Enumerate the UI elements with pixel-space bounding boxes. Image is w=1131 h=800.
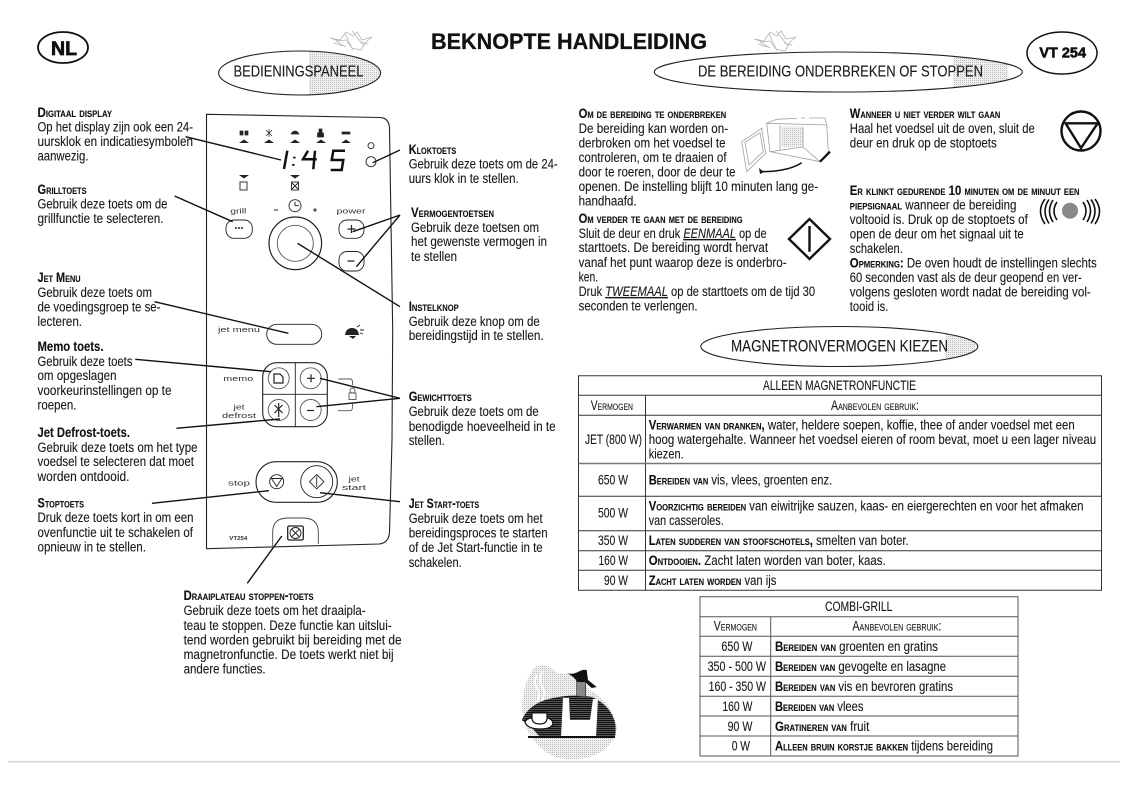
panel: control panel drawing <box>206 114 393 549</box>
table: combi-grill: Vermogen <box>714 619 757 634</box>
table: combi-grill: Bereiden van gevogelte en lasagne <box>775 659 946 674</box>
text: draaiplateau stoppen-toets: tend worden gebruikt bij bereiding met de <box>184 632 402 648</box>
table: combi-grill: Bereiden van vis en bevroren gratins <box>775 679 953 694</box>
text: gewichttoets <box>409 389 556 448</box>
text: wanneer u niet verder wilt gaan <box>850 106 1035 150</box>
table: alleen magnetronfunctie: Verwarmen van dranken, water, heldere soepen, koffie, thee of ander voedsel met een <box>649 417 1075 432</box>
table: combi-grill: COMBI-GRILL <box>825 599 893 614</box>
text: vermogentoetsen <box>411 205 547 264</box>
turntable stop button: VT254 <box>229 536 248 542</box>
text: grilltoets: grillfunctie te selecteren. <box>38 211 164 226</box>
text: om de bereiding te onderbreken: De bereiding kan worden on- <box>579 121 728 136</box>
text: gewichttoets: Gewichttoets <box>409 389 472 404</box>
text: jet start-toets: Jet Start-toets <box>409 496 479 511</box>
heading: magnetronvermogen kiezen: MAGNETRONVERMOGEN KIEZEN <box>731 337 948 356</box>
text: om de bereiding te onderbreken: Om de bereiding te onderbreken <box>579 106 726 121</box>
text: stoptoets: Druk deze toets kort in om een <box>38 510 194 525</box>
text: opmerking <box>850 256 1097 314</box>
text: instelknop <box>409 299 544 343</box>
text: piepsignaal: piepsignaal wanneer de bereiding <box>850 198 1016 212</box>
icon: chef with coffee <box>522 665 617 759</box>
text: jet defrost-toets: worden ontdooid. <box>37 469 129 484</box>
stop and start button group <box>228 462 367 502</box>
icon: beep signal <box>1040 199 1100 224</box>
text: piepsignaal: schakelen. <box>850 241 903 256</box>
table: combi-grill: 90 W <box>728 719 753 734</box>
text: kloktoets: Gebruik deze toets om de 24- <box>409 156 558 172</box>
digital display 1:45 <box>284 151 345 170</box>
table: alleen magnetronfunctie: Ontdooien. Zacht laten worden van boter, kaas. <box>649 553 886 568</box>
text: vermogentoetsen: Gebruik deze toetsen om <box>411 220 539 235</box>
table: combi-grill: Bereiden van vlees <box>775 699 864 714</box>
text: om de bereiding te onderbreken <box>579 106 818 209</box>
table: alleen magnetronfunctie: 90 W <box>604 573 628 588</box>
text: jet start-toets: schakelen. <box>409 555 462 570</box>
clock key <box>366 143 376 167</box>
table: alleen magnetronfunctie: 500 W <box>598 506 628 521</box>
text: om verder te gaan: seconden te verlengen. <box>579 299 698 314</box>
heading: de bereiding onderbreken of stoppen <box>654 52 1022 92</box>
text: stoptoets: ovenfunctie uit te schakelen of <box>38 525 193 540</box>
table: combi-grill: 160 - 350 W <box>709 679 766 694</box>
text: draaiplateau stoppen-toets: andere functies. <box>184 662 266 676</box>
dial <box>269 200 322 270</box>
text: grilltoets: Grilltoets <box>38 182 86 197</box>
text: draaiplateau stoppen-toets <box>184 588 402 676</box>
text: vermogentoetsen: te stellen <box>411 249 457 264</box>
table: combi-grill: Aanbevolen gebruik: <box>852 619 941 634</box>
text: piepsignaal: open de deur om het signaal uit te <box>850 227 1024 242</box>
text: om verder te gaan: ken. <box>579 270 598 285</box>
text: memo toets: roepen. <box>38 398 76 412</box>
heading: de bereiding onderbreken of stoppen: DE BEREIDING ONDERBREKEN OF STOPPEN <box>698 64 983 81</box>
text: om de bereiding te onderbreken: openen. De instelling blijft 10 minuten lang ge- <box>579 179 818 194</box>
text: draaiplateau stoppen-toets: teau te stoppen. Deze functie kan uitslui- <box>184 618 392 633</box>
table: combi-grill: 0 W <box>732 739 750 754</box>
text: instelknop: Instelknop <box>409 299 459 314</box>
heading: magnetronvermogen kiezen <box>701 326 978 367</box>
text: instelknop: bereidingstijd in te stellen. <box>409 328 544 343</box>
table: alleen magnetronfunctie: ALLEEN MAGNETRONFUNCTIE <box>763 378 916 393</box>
text: om verder te gaan <box>579 211 815 314</box>
stop and start button group: stop <box>228 478 250 488</box>
panel outline <box>206 114 393 549</box>
leader lines <box>135 137 400 583</box>
stop and start button group: jet <box>347 474 361 484</box>
text: om verder te gaan: Om verder te gaan met de bereiding <box>579 211 743 226</box>
table: combi-grill: 650 W <box>721 639 753 654</box>
text: piepsignaal: Er klinkt gedurende 10 minuten om de minuut een <box>850 183 1080 198</box>
text: wanneer u niet verder wilt gaan: Wanneer u niet verder wilt gaan <box>850 106 1000 121</box>
text: kloktoets: Kloktoets <box>409 142 456 157</box>
table: combi-grill: 350 - 500 W <box>708 659 766 674</box>
text: vermogentoetsen: het gewenste vermogen in <box>411 234 547 249</box>
text: jet defrost-toets: Gebruik deze toets om het type <box>38 440 198 455</box>
table: combi-grill: 160 W <box>722 699 753 714</box>
badge: NL: NL <box>51 39 77 60</box>
text: opmerking: volgens gesloten wordt nadat de bereiding vol- <box>850 285 1091 300</box>
text: om verder te gaan: Sluit de deur en druk EENMAAL op de <box>579 226 767 241</box>
text: jet defrost-toets <box>37 425 197 484</box>
text: om de bereiding te onderbreken: derbroken om het voedsel te <box>579 136 726 150</box>
icon: open oven <box>742 118 830 174</box>
table: alleen magnetronfunctie: Aanbevolen gebruik: <box>831 398 919 413</box>
text: memo toets: voorkeurinstellingen op te <box>38 383 172 398</box>
text: grilltoets: Gebruik deze toets om de <box>38 196 168 212</box>
text: grilltoets <box>38 182 168 226</box>
text: om verder te gaan: vanaf het punt waarop deze is onderbro- <box>579 255 787 270</box>
icon: start diamond <box>789 219 830 259</box>
table: combi-grill: Alleen bruin korstje bakken tijdens bereiding <box>775 739 993 754</box>
badge: VT 254: VT 254 <box>1039 46 1086 62</box>
text: opmerking: Opmerking: De oven houdt de instellingen slechts <box>850 256 1097 271</box>
icon: stop symbol <box>1062 112 1100 150</box>
text: memo toets: Gebruik deze toets <box>38 354 133 369</box>
table: alleen magnetronfunctie: 350 W <box>598 533 628 548</box>
grill button: grill <box>230 206 247 216</box>
text: gewichttoets: Gebruik deze toets om de <box>409 404 539 419</box>
grill button <box>226 206 252 238</box>
lower indicators <box>239 175 300 190</box>
jet menu button: jet menu <box>217 325 260 334</box>
text: jet start-toets: of de Jet Start-functie in te <box>409 540 543 555</box>
text: om de bereiding te onderbreken: door te roeren, door de deur te <box>579 165 736 180</box>
text: wanneer u niet verder wilt gaan: deur en druk op de stoptoets <box>850 136 997 150</box>
indicator icons top row <box>239 129 351 143</box>
text: gewichttoets: benodigde hoeveelheid in te <box>409 419 556 434</box>
table: combi-grill <box>700 597 1018 756</box>
text: piepsignaal <box>850 183 1080 256</box>
title: BEKNOPTE HANDLEIDING <box>431 29 707 54</box>
table: alleen magnetronfunctie: Bereiden van vis, vlees, groenten enz. <box>649 473 832 488</box>
heading: bedieningspaneel: BEDIENINGSPANEEL <box>234 64 364 81</box>
text: draaiplateau stoppen-toets: Gebruik deze toets om het draaipla- <box>184 603 366 618</box>
memo / weight button group: jet <box>232 402 246 412</box>
power buttons: power <box>336 206 366 216</box>
text: digitaal display: Op het display zijn ook een 24- <box>38 120 193 134</box>
icon: flourish left <box>330 31 372 50</box>
text: stoptoets: opnieuw in te stellen. <box>38 540 146 554</box>
text: om verder te gaan: starttoets. De bereiding wordt hervat <box>579 240 768 255</box>
text: jet menu: Jet Menu <box>38 270 80 285</box>
table: alleen magnetronfunctie: Zacht laten worden van ijs <box>649 573 777 588</box>
table: alleen magnetronfunctie: kiezen. <box>649 447 684 462</box>
text: jet start-toets: bereidingsproces te starten <box>409 526 548 540</box>
text: jet defrost-toets: voedsel te selecteren dat moet <box>38 454 194 469</box>
heading: bedieningspaneel <box>219 50 381 96</box>
jet menu button <box>217 324 364 344</box>
table: alleen magnetronfunctie <box>578 376 1102 590</box>
table: combi-grill: Gratineren van fruit <box>775 719 870 734</box>
text: jet defrost-toets: Jet Defrost-toets. <box>38 425 130 440</box>
text: jet menu <box>38 270 160 329</box>
badge: VT 254 <box>1027 32 1097 74</box>
table: alleen magnetronfunctie: 650 W <box>598 473 628 488</box>
text: memo toets: Memo toets. <box>38 339 104 354</box>
text: digitaal display <box>38 105 193 164</box>
text: digitaal display: Digitaal display <box>38 105 112 120</box>
stop and start button group: start <box>342 483 367 492</box>
text: digitaal display: aanwezig. <box>38 148 88 164</box>
table: combi-grill: Bereiden van groenten en gratins <box>775 639 938 654</box>
text: stoptoets <box>38 496 194 554</box>
table: alleen magnetronfunctie: 160 W <box>598 553 628 568</box>
text: jet menu: lecteren. <box>38 314 82 329</box>
turntable stop button <box>229 518 318 546</box>
text: memo toets <box>38 339 172 412</box>
text: vermogentoetsen: Vermogentoetsen <box>411 205 494 220</box>
table: alleen magnetronfunctie: JET (800 W) <box>585 432 642 447</box>
text: om de bereiding te onderbreken: controleren, om te draaien of <box>579 150 727 165</box>
text: opmerking: tooid is. <box>850 299 888 314</box>
text: jet menu: Gebruik deze toets om <box>38 285 152 300</box>
bottom rule <box>8 761 1120 762</box>
memo / weight button group: memo <box>223 374 253 383</box>
icon: flourish right <box>754 31 796 51</box>
text: kloktoets: uurs klok in te stellen. <box>409 171 519 186</box>
text: jet start-toets: Gebruik deze toets om het <box>409 511 543 526</box>
table: alleen magnetronfunctie: Vermogen <box>591 398 633 413</box>
text: wanneer u niet verder wilt gaan: Haal het voedsel uit de oven, sluit de <box>850 121 1035 136</box>
table: alleen magnetronfunctie: van casseroles. <box>649 513 724 528</box>
text: om de bereiding te onderbreken: handhaafd. <box>579 194 637 209</box>
text: opmerking: 60 seconden vast als de deur geopend en ver- <box>850 270 1082 285</box>
weight bracket <box>338 379 356 411</box>
text: instelknop: Gebruik deze knop om de <box>409 314 540 329</box>
badge: NL <box>38 32 88 63</box>
text: gewichttoets: stellen. <box>409 433 445 448</box>
text: kloktoets <box>409 142 558 186</box>
memo / weight button group <box>222 363 327 427</box>
text: jet menu: de voedingsgroep te se- <box>38 300 160 314</box>
text: digitaal display: uursklok en indicatiesymbolen <box>38 134 193 149</box>
memo / weight button group: defrost <box>222 411 257 420</box>
text: om verder te gaan: Druk TWEEMAAL op de starttoets om de tijd 30 <box>579 284 815 299</box>
text: draaiplateau stoppen-toets: magnetronfunctie. De toets werkt niet bij <box>184 647 394 662</box>
table: alleen magnetronfunctie: Laten sudderen van stoofschotels, smelten van boter. <box>649 533 909 548</box>
text: piepsignaal: voltooid is. Druk op de stoptoets of <box>850 212 1028 227</box>
text: jet start-toets <box>409 496 548 570</box>
text: stoptoets: Stoptoets <box>38 496 84 510</box>
text: draaiplateau stoppen-toets: Draaiplateau stoppen-toets <box>184 588 314 603</box>
power buttons <box>336 206 366 271</box>
text: memo toets: om opgeslagen <box>38 368 116 383</box>
